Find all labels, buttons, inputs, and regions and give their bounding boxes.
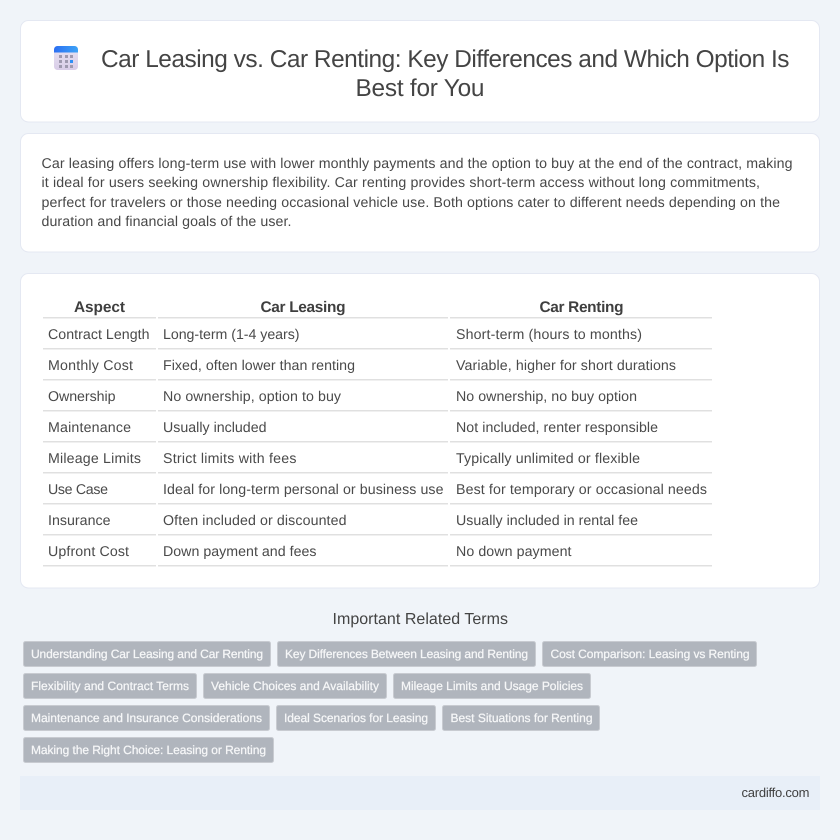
tag [204, 674, 386, 698]
tag: Cost Comparison: Leasing vs Renting [550, 647, 750, 661]
tag: Key Differences Between Leasing and Renting [285, 647, 528, 661]
tag [442, 706, 600, 730]
intro paragraph [42, 156, 792, 230]
intro paragraph: Car leasing offers long-term use with lower monthly payments and the option to buy at the end of the contract, making [42, 156, 792, 172]
intro paragraph: duration and financial goals of the user. [42, 214, 292, 230]
row: contract length [48, 327, 642, 343]
tag [542, 642, 756, 666]
footer domain: cardiffo.com [742, 785, 810, 800]
table header row: Car Renting [540, 299, 624, 316]
tag [24, 642, 270, 666]
row: use case: Best for temporary or occasional needs [456, 482, 707, 498]
icon: calendar [54, 46, 78, 70]
row: contract length: Long-term (1-4 years) [163, 327, 300, 343]
row: maintenance [48, 420, 658, 436]
row: use case: Use Case [48, 482, 108, 498]
row: maintenance: Usually included [163, 420, 266, 436]
row: mileage limits: Strict limits with fees [163, 451, 296, 467]
tag: Maintenance and Insurance Considerations [31, 711, 262, 725]
intro paragraph: perfect for travelers or those needing occasional vehicle use. Both options cater to different needs depending on the [42, 195, 780, 211]
table header row: Aspect [74, 299, 125, 316]
title text: Car Leasing vs. Car Renting: Key Differences and Which Option Is [101, 46, 790, 73]
footer bar [20, 776, 820, 810]
row: use case [48, 482, 707, 498]
row: maintenance: Not included, renter responsible [456, 420, 658, 436]
row: monthly cost: Fixed, often lower than renting [163, 358, 355, 374]
row: mileage limits [48, 451, 640, 467]
tag: Vehicle Choices and Availability [211, 679, 379, 693]
tag: Ideal Scenarios for Leasing [284, 711, 428, 725]
related term tags [24, 642, 756, 762]
row: upfront cost [48, 544, 572, 560]
tag: Mileage Limits and Usage Policies [401, 679, 583, 693]
row: upfront cost: Down payment and fees [163, 544, 316, 560]
tag: Making the Right Choice: Leasing or Renting [31, 743, 266, 757]
heading: important related terms: Important Related Terms [332, 611, 508, 628]
row: ownership: No ownership, no buy option [456, 389, 637, 405]
row: monthly cost [48, 358, 676, 374]
row: maintenance: Maintenance [48, 420, 131, 436]
panel: title [20, 20, 820, 122]
row: ownership: No ownership, option to buy [163, 389, 342, 405]
intro paragraph: it ideal for users seeking ownership flexibility. Car renting provides short-term access without long commitments, [42, 175, 760, 191]
row: insurance: Insurance [48, 513, 111, 529]
title text [101, 46, 790, 102]
table header row [74, 299, 624, 316]
tag [24, 738, 274, 762]
tag: Flexibility and Contract Terms [31, 679, 189, 693]
row: use case: Ideal for long-term personal or business use [163, 482, 444, 498]
row: insurance: Often included or discounted [163, 513, 346, 529]
row: insurance: Usually included in rental fee [456, 513, 638, 529]
tag [24, 706, 270, 730]
tag: Best Situations for Renting [450, 711, 592, 725]
row: ownership: Ownership [48, 389, 116, 405]
row: monthly cost: Monthly Cost [48, 358, 133, 374]
row: contract length: Contract Length [48, 327, 150, 343]
row: contract length: Short-term (hours to months) [456, 327, 642, 343]
tag [276, 706, 436, 730]
panel: comparison table [20, 274, 820, 588]
row: upfront cost: Upfront Cost [48, 544, 129, 560]
row: insurance [48, 513, 638, 529]
panel: introduction [20, 134, 820, 252]
row: ownership [48, 389, 637, 405]
tag: Understanding Car Leasing and Car Renting [31, 647, 263, 661]
tag [24, 674, 196, 698]
row: monthly cost: Variable, higher for short durations [456, 358, 676, 374]
row: mileage limits: Typically unlimited or flexible [456, 451, 640, 467]
tag [394, 674, 590, 698]
tag [278, 642, 536, 666]
row: mileage limits: Mileage Limits [48, 451, 141, 467]
table header row: Car Leasing [260, 299, 346, 316]
title text: Best for You [356, 75, 484, 102]
row: upfront cost: No down payment [456, 544, 572, 560]
